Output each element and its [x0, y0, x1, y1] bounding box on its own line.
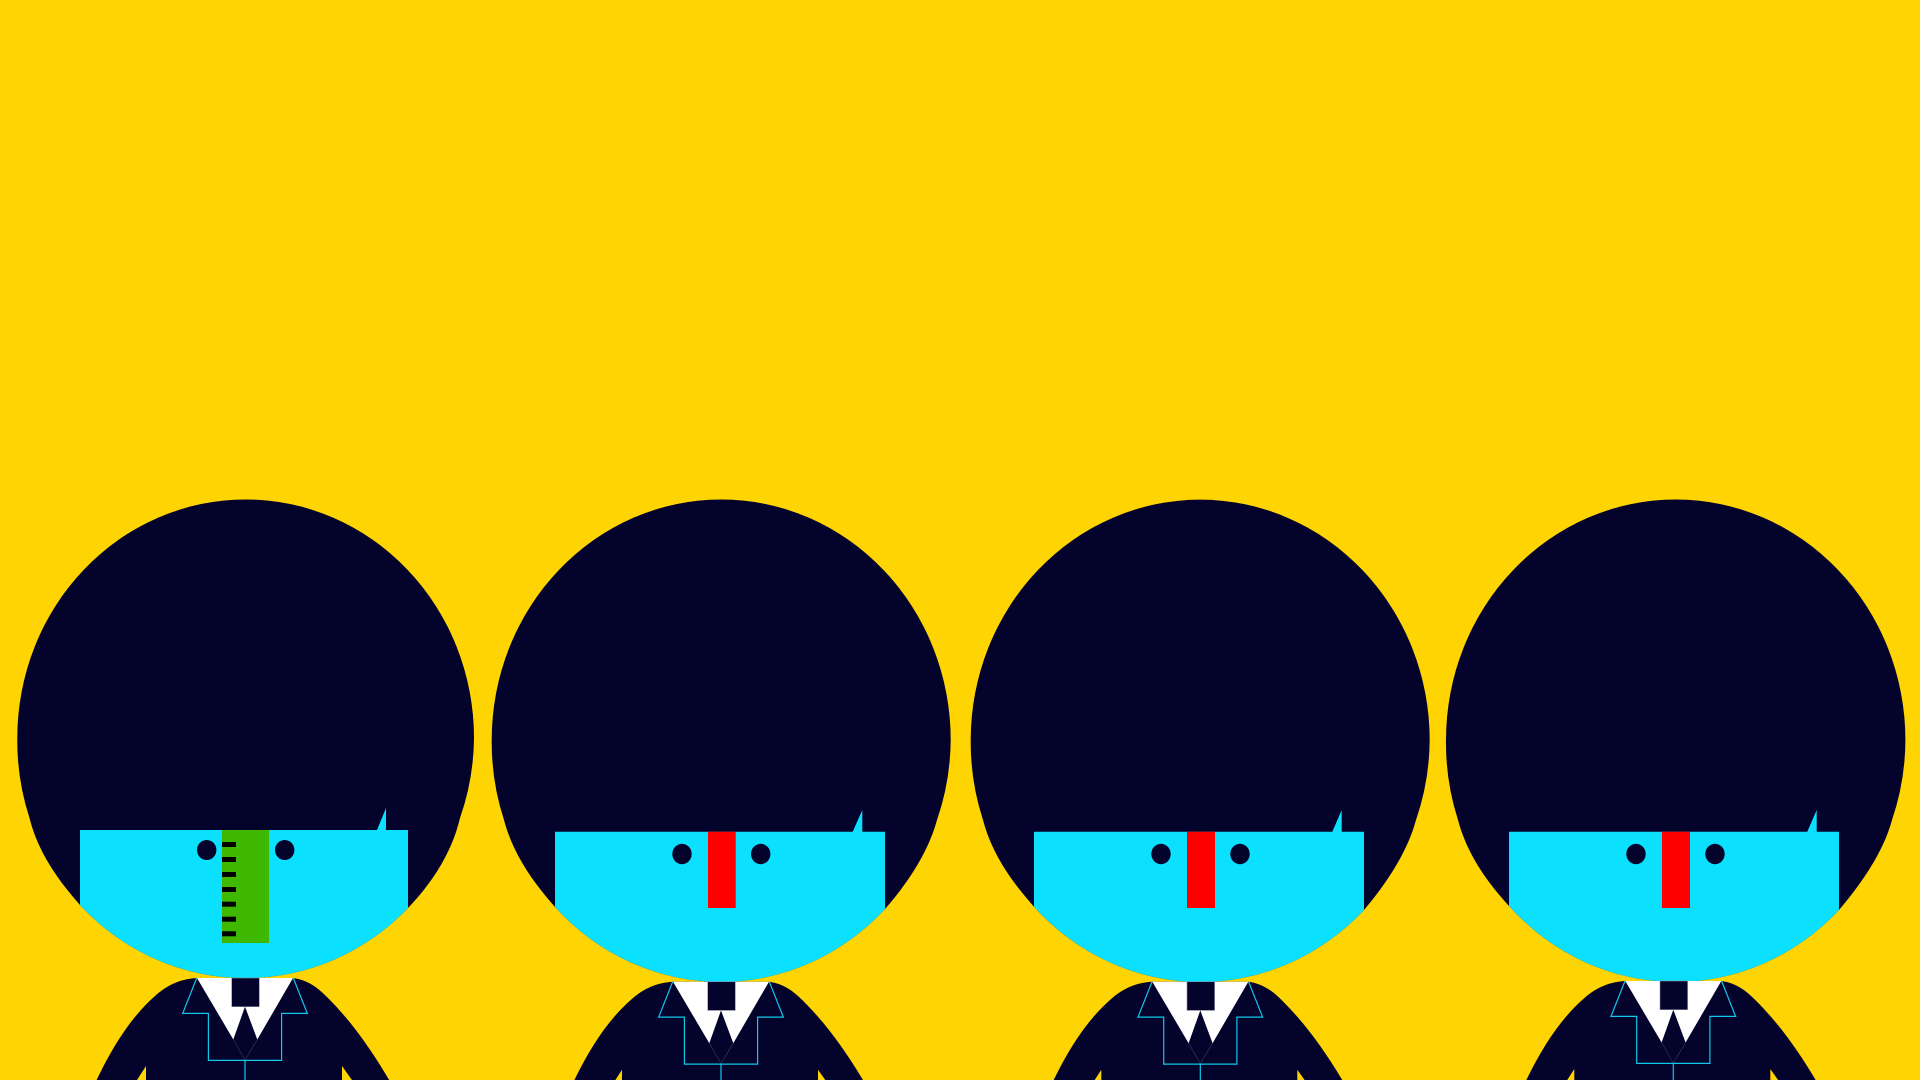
- figure 2 right eye: [751, 844, 770, 864]
- figure 3 suit body: [1047, 982, 1350, 1080]
- figure 3 right eye: [1230, 844, 1250, 864]
- figure 2 with red nose: [492, 500, 951, 1080]
- figure 2 face: [555, 810, 885, 982]
- figure 1 suit body: [92, 978, 395, 1080]
- figure 1 face: [80, 808, 408, 978]
- figure 2 suit body: [568, 982, 871, 1080]
- figure 3 left eye: [1151, 844, 1171, 864]
- figure 3 face: [1034, 810, 1364, 982]
- figure 4 right eye: [1705, 844, 1725, 864]
- figure 4 left eye: [1626, 844, 1646, 864]
- figure 2 red nose: [708, 832, 736, 908]
- figure 1 right eye: [275, 840, 294, 860]
- figure 3 red nose: [1187, 832, 1215, 908]
- figure 4 hair: [1446, 500, 1905, 982]
- figure 4 with red nose: [1446, 500, 1905, 1080]
- figure 2 left eye: [672, 844, 692, 864]
- figure 3 hair: [971, 500, 1430, 982]
- figure 2 hair: [492, 500, 951, 982]
- figure 4 face: [1509, 810, 1839, 982]
- figure 4 red nose: [1662, 832, 1690, 908]
- figure 3 with red nose: [971, 500, 1430, 1080]
- figure 1 hair: [17, 499, 474, 978]
- figure 1 green nose with ticks: [222, 830, 269, 943]
- figure 4 suit body: [1520, 981, 1823, 1080]
- figure 1 with green nose: [17, 499, 474, 1080]
- figure 1 left eye: [197, 840, 216, 860]
